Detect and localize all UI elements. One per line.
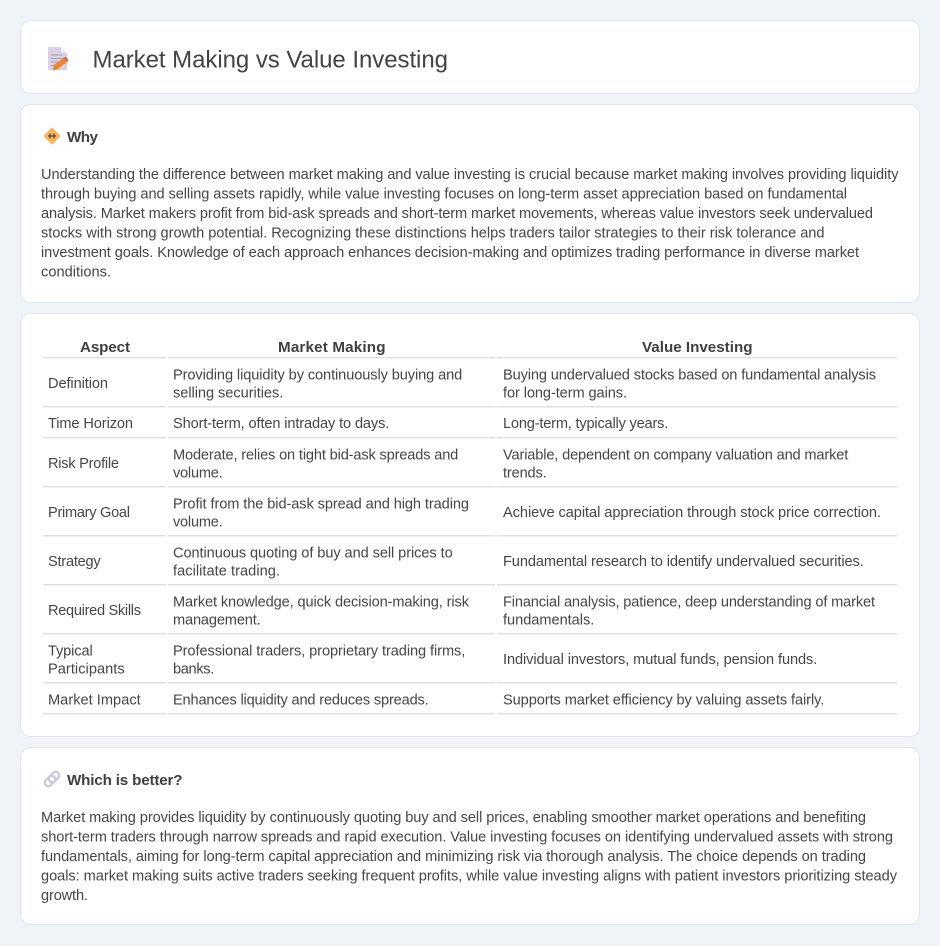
text block: why explanation: through buying and selling assets rapidly, while value investing focuses on long-term asset appreciation based on fundamental <box>41 186 847 202</box>
table header row <box>80 339 752 356</box>
text block: which is better explanation: fundamentals, aiming for long-term capital appreciation and minimizing risk via thorough analysis. The choice depends on trading <box>41 849 866 865</box>
table row: time horizon: Short-term, often intraday to days. <box>173 416 389 432</box>
table row: strategy <box>48 545 864 579</box>
table row: typical participants: Individual investors, mutual funds, pension funds. <box>503 652 817 668</box>
table row: typical participants <box>48 643 817 677</box>
table row: definition: Buying undervalued stocks based on fundamental analysis <box>503 367 876 383</box>
heading: why: Why <box>67 129 99 146</box>
table row: typical participants: banks. <box>173 661 214 677</box>
table row: definition <box>48 367 876 401</box>
text block: why explanation: Understanding the difference between market making and value investing is crucial because market making involves providing liquidity <box>41 167 899 183</box>
text block: which is better explanation: short-term traders through narrow spreads and rapid execution. Value investing focuses on identifying undervalued assets with strong <box>41 830 893 846</box>
table row: primary goal: Profit from the bid-ask spread and high trading <box>173 496 469 512</box>
table row: market impact: Market Impact <box>48 692 141 708</box>
table row: primary goal: volume. <box>173 514 223 530</box>
text block: which is better explanation: Market making provides liquidity by continuously quoting buy and sell prices, enabling smoother market operations and benefiting <box>41 810 866 826</box>
table row: strategy: facilitate trading. <box>173 563 280 579</box>
table row: required skills: Financial analysis, patience, deep understanding of market <box>503 594 875 610</box>
table row: primary goal: Achieve capital appreciation through stock price correction. <box>503 505 881 521</box>
table row: risk profile: trends. <box>503 465 547 481</box>
table row: market impact <box>48 692 824 708</box>
text block: which is better explanation: growth. <box>41 888 88 904</box>
text block: why explanation: analysis. Market makers profit from bid-ask spreads and short-term market movements, whereas value investors seek undervalued <box>41 206 873 222</box>
table row: market impact: Supports market efficiency by valuing assets fairly. <box>503 692 824 708</box>
table row: risk profile: Risk Profile <box>48 456 119 472</box>
table row: strategy: Fundamental research to identify undervalued securities. <box>503 554 864 570</box>
table row: required skills: Required Skills <box>48 603 141 619</box>
heading: which is better: Which is better? <box>67 772 182 789</box>
table row: typical participants: Typical <box>48 643 93 659</box>
table row: definition: Definition <box>48 376 108 392</box>
table row: required skills: management. <box>173 612 261 628</box>
text block: why explanation: stocks with strong growth potential. Recognizing these distinctions helps traders tailor strategies to their risk tolerance and <box>41 226 824 242</box>
table header row: Value Investing <box>642 339 752 356</box>
text block: why explanation: conditions. <box>41 264 111 280</box>
table row: risk profile: Variable, dependent on company valuation and market <box>503 447 848 463</box>
panel: which is better <box>20 748 920 924</box>
table row: market impact: Enhances liquidity and reduces spreads. <box>173 692 429 708</box>
table header row: Aspect <box>80 339 130 356</box>
table row: time horizon: Long-term, typically years. <box>503 416 668 432</box>
table row: definition: selling securities. <box>173 385 283 401</box>
table row: risk profile: volume. <box>173 465 223 481</box>
table row: typical participants: Participants <box>48 661 125 677</box>
table row: strategy: Strategy <box>48 554 101 570</box>
text block: which is better explanation <box>41 810 898 904</box>
table row: strategy: Continuous quoting of buy and sell prices to <box>173 545 453 561</box>
table row: required skills: Market knowledge, quick decision-making, risk <box>173 594 470 610</box>
panel: why <box>20 104 920 302</box>
table row: risk profile <box>48 447 848 481</box>
text block: which is better explanation: goals: market making suits active traders seeking frequent profits, while value investing aligns with patient investors prioritizing steady <box>41 868 898 884</box>
table row: definition: for long-term gains. <box>503 385 627 401</box>
table row: definition: Providing liquidity by continuously buying and <box>173 367 462 383</box>
table row: primary goal: Primary Goal <box>48 505 130 521</box>
table row: time horizon: Time Horizon <box>48 416 133 432</box>
text block: why explanation: investment goals. Knowledge of each approach enhances decision-making and optimizes trading performance in diverse market <box>41 245 859 261</box>
table row: required skills <box>48 594 875 628</box>
icon: chain link <box>43 770 61 788</box>
panel: title header <box>20 20 920 94</box>
text block: why explanation <box>41 167 899 280</box>
table row: required skills: fundamentals. <box>503 612 594 628</box>
icon: warning diamond <box>44 128 60 144</box>
table header row: Market Making <box>278 339 386 356</box>
icon: document with pencil <box>48 47 68 70</box>
table row: risk profile: Moderate, relies on tight bid-ask spreads and <box>173 447 458 463</box>
table row: primary goal <box>48 496 881 530</box>
panel: comparison table <box>20 314 920 736</box>
title: Market Making vs Value Investing <box>92 46 448 74</box>
table row: time horizon <box>48 416 668 432</box>
table row: typical participants: Professional traders, proprietary trading firms, <box>173 643 465 659</box>
